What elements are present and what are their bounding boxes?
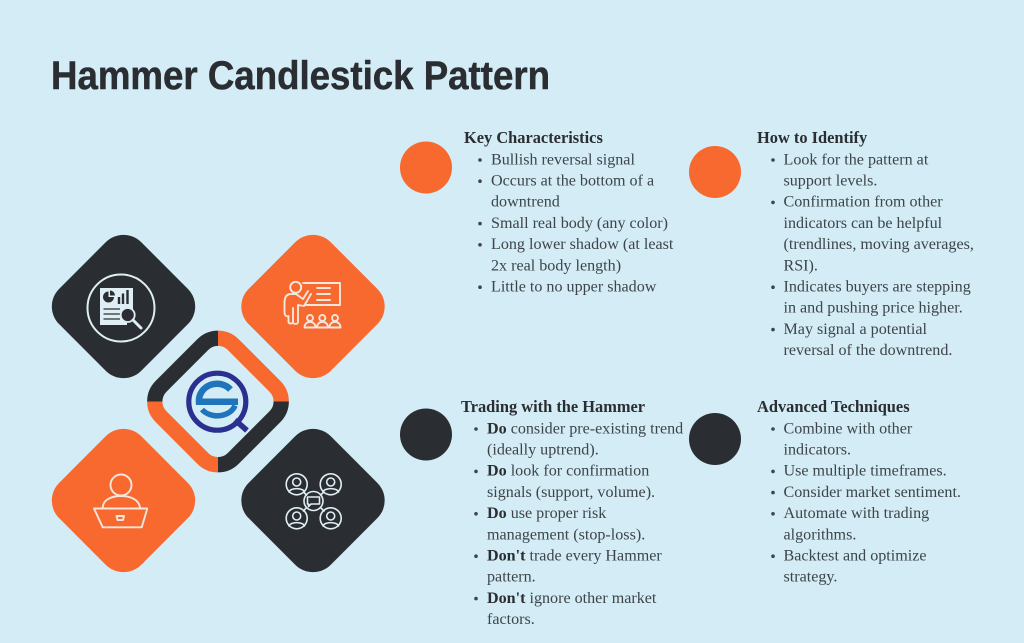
panel: advanced techniques: strategy. bbox=[784, 569, 837, 586]
panel: network people icon diamond bbox=[231, 418, 395, 583]
panel: presenter icon diamond bbox=[231, 224, 395, 389]
marker: key characteristics circle bbox=[400, 142, 452, 194]
panel: how to identify: indicators can be helpful bbox=[784, 215, 943, 232]
panel: trading with the hammer: factors. bbox=[487, 611, 535, 628]
panel: advanced techniques: algorithms. bbox=[784, 526, 856, 543]
panel: how to identify: May signal a potential bbox=[784, 321, 927, 338]
panel: advanced techniques: Advanced Techniques bbox=[757, 397, 910, 416]
panel: laptop user icon diamond bbox=[41, 418, 206, 583]
panel: key characteristics: Little to no upper shadow bbox=[491, 278, 657, 296]
marker: advanced techniques circle bbox=[689, 413, 741, 465]
marker: how to identify circle bbox=[689, 146, 741, 198]
panel: how to identify: support levels. bbox=[784, 172, 877, 190]
panel: trading with the hammer: pattern. bbox=[487, 569, 536, 586]
panel: how to identify bbox=[757, 128, 974, 359]
panel: trading with the hammer: Do consider pre-existing trend bbox=[487, 420, 683, 437]
panel: key characteristics: Small real body (any color) bbox=[491, 215, 668, 232]
panel: key characteristics: Occurs at the bottom of a bbox=[491, 172, 654, 190]
panel: central logo ring bbox=[146, 329, 290, 474]
panel: advanced techniques: indicators. bbox=[784, 442, 851, 458]
panel: advanced techniques bbox=[757, 397, 961, 586]
panel: advanced techniques: Combine with other bbox=[784, 420, 913, 437]
panel: trading with the hammer: Do look for confirmation bbox=[487, 463, 649, 480]
panel: trading with the hammer bbox=[461, 397, 683, 628]
panel: advanced techniques: Use multiple timeframes. bbox=[784, 463, 947, 480]
panel: advanced techniques: Automate with trading bbox=[784, 505, 929, 522]
panel: trading with the hammer: Do use proper risk bbox=[487, 505, 607, 522]
marker: trading circle bbox=[400, 408, 452, 460]
panel: how to identify: reversal of the downtrend. bbox=[784, 342, 952, 359]
panel: how to identify: How to Identify bbox=[757, 128, 868, 147]
panel: trading with the hammer: Trading with the Hammer bbox=[461, 397, 645, 416]
panel: key characteristics: Bullish reversal signal bbox=[491, 151, 635, 168]
panel: trading with the hammer: Don't trade every Hammer bbox=[487, 548, 662, 564]
panel: key characteristics bbox=[464, 128, 674, 296]
panel: advanced techniques: Consider market sentiment. bbox=[784, 484, 961, 501]
panel: how to identify: in and pushing price higher. bbox=[784, 300, 963, 317]
panel: trading with the hammer: Don't ignore other market bbox=[487, 590, 657, 607]
panel: how to identify: Confirmation from other bbox=[784, 194, 943, 211]
panel: key characteristics: downtrend bbox=[491, 194, 560, 211]
panel: trading with the hammer: management (stop-loss). bbox=[487, 526, 645, 543]
panel: trading with the hammer: (ideally uptrend). bbox=[487, 442, 599, 458]
panel: report icon diamond bbox=[41, 224, 206, 389]
panel: key characteristics: Long lower shadow (at least bbox=[491, 236, 674, 253]
panel: advanced techniques: Backtest and optimize bbox=[784, 548, 927, 564]
icon: logo bbox=[189, 373, 247, 430]
title: Hammer Candlestick Pattern bbox=[51, 54, 550, 98]
panel: how to identify: (trendlines, moving averages, bbox=[784, 236, 974, 253]
panel: key characteristics: Key Characteristics bbox=[464, 128, 603, 147]
panel: how to identify: RSI). bbox=[784, 257, 818, 274]
panel: how to identify: Look for the pattern at bbox=[784, 151, 929, 168]
panel: how to identify: Indicates buyers are stepping bbox=[784, 278, 971, 296]
panel: key characteristics: 2x real body length) bbox=[491, 257, 621, 274]
panel: trading with the hammer: signals (support, volume). bbox=[487, 484, 655, 501]
